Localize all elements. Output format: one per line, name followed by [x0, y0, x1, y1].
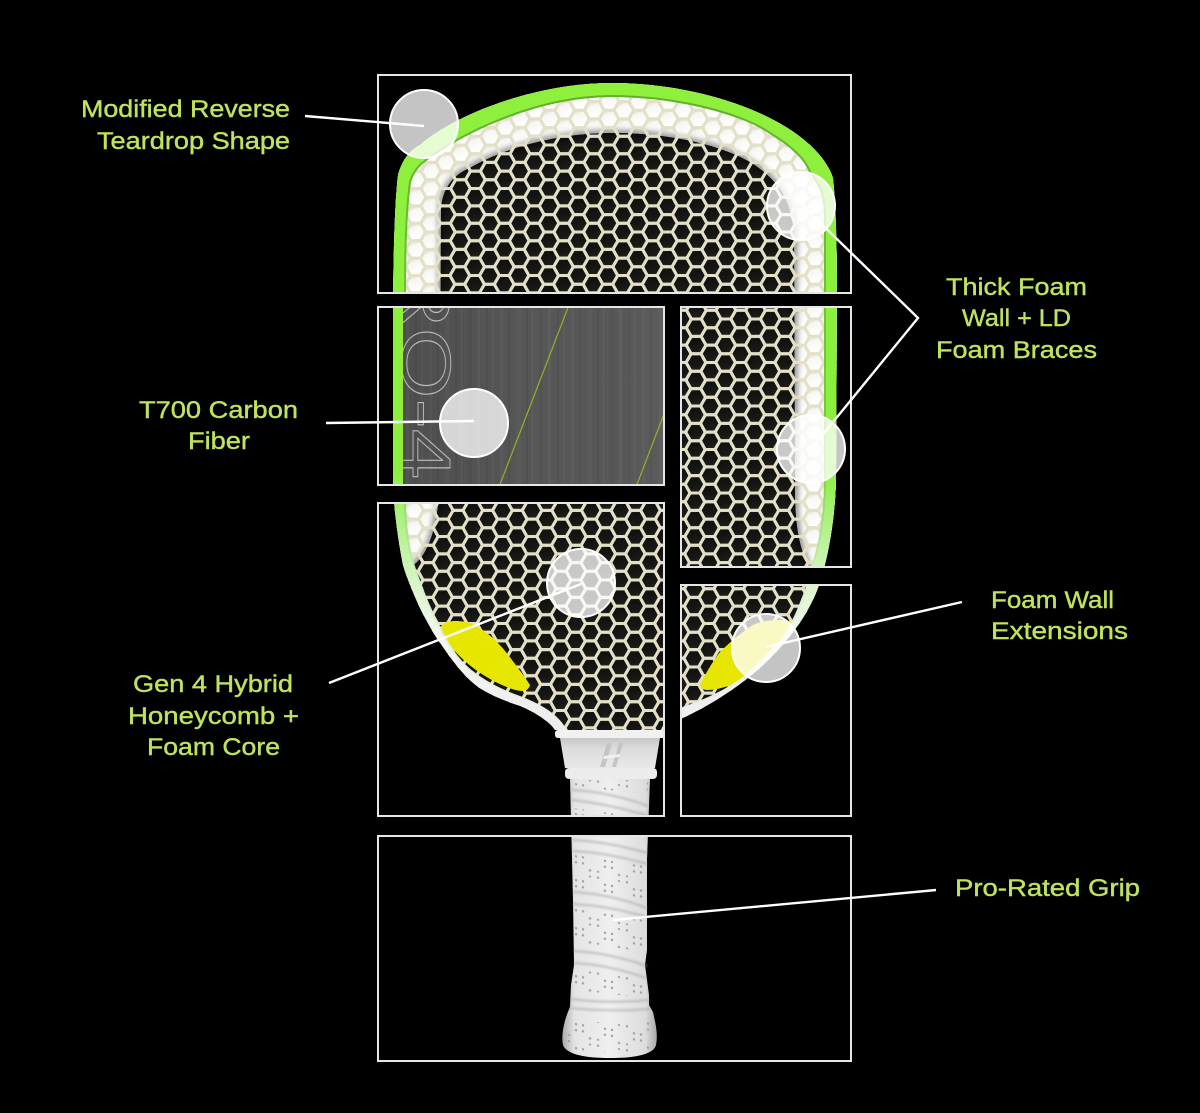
callout: Modified Reverse Teardrop Shape: Modified Reverse — [81, 96, 290, 123]
panel: lower left paddle with foam extension and throat — [377, 502, 665, 817]
callout: Gen 4 Hybrid Honeycomb + Foam Core: Gen 4 Hybrid — [133, 671, 293, 698]
callout: Thick Foam Wall + LD Foam Braces — [767, 172, 1097, 483]
panel: T700 carbon fiber surface — [377, 306, 665, 486]
callout: Modified Reverse Teardrop Shape: Teardrop Shape — [97, 128, 290, 155]
callout: Pro-Rated Grip: Pro-Rated Grip — [955, 875, 1140, 902]
callout: Foam Wall Extensions: Foam Wall — [991, 587, 1114, 614]
callout: Thick Foam Wall + LD Foam Braces: Foam Braces — [936, 337, 1097, 364]
callout: T700 Carbon Fiber — [139, 389, 508, 457]
panel: lower right paddle with foam extension — [680, 584, 852, 817]
callout: Foam Wall Extensions: Extensions — [991, 618, 1128, 645]
callout: Thick Foam Wall + LD Foam Braces: Wall + LD — [962, 305, 1071, 332]
callout: Gen 4 Hybrid Honeycomb + Foam Core — [128, 549, 615, 761]
callout: Modified Reverse Teardrop Shape — [81, 90, 458, 158]
callout: Gen 4 Hybrid Honeycomb + Foam Core: Honeycomb + — [128, 703, 299, 730]
callout: Thick Foam Wall + LD Foam Braces: Thick Foam — [946, 274, 1087, 301]
callout: Pro-Rated Grip — [613, 875, 1140, 920]
panel: pro-rated grip handle — [377, 835, 852, 1062]
callout: Foam Wall Extensions — [732, 587, 1128, 682]
panel: top of paddle face with lime frame and foam wall — [377, 74, 852, 294]
panel: honeycomb core and right foam wall — [680, 306, 852, 568]
callout: T700 Carbon Fiber: T700 Carbon — [139, 397, 298, 424]
callout: Gen 4 Hybrid Honeycomb + Foam Core: Foam Core — [147, 734, 280, 761]
callout: T700 Carbon Fiber: Fiber — [188, 428, 250, 455]
